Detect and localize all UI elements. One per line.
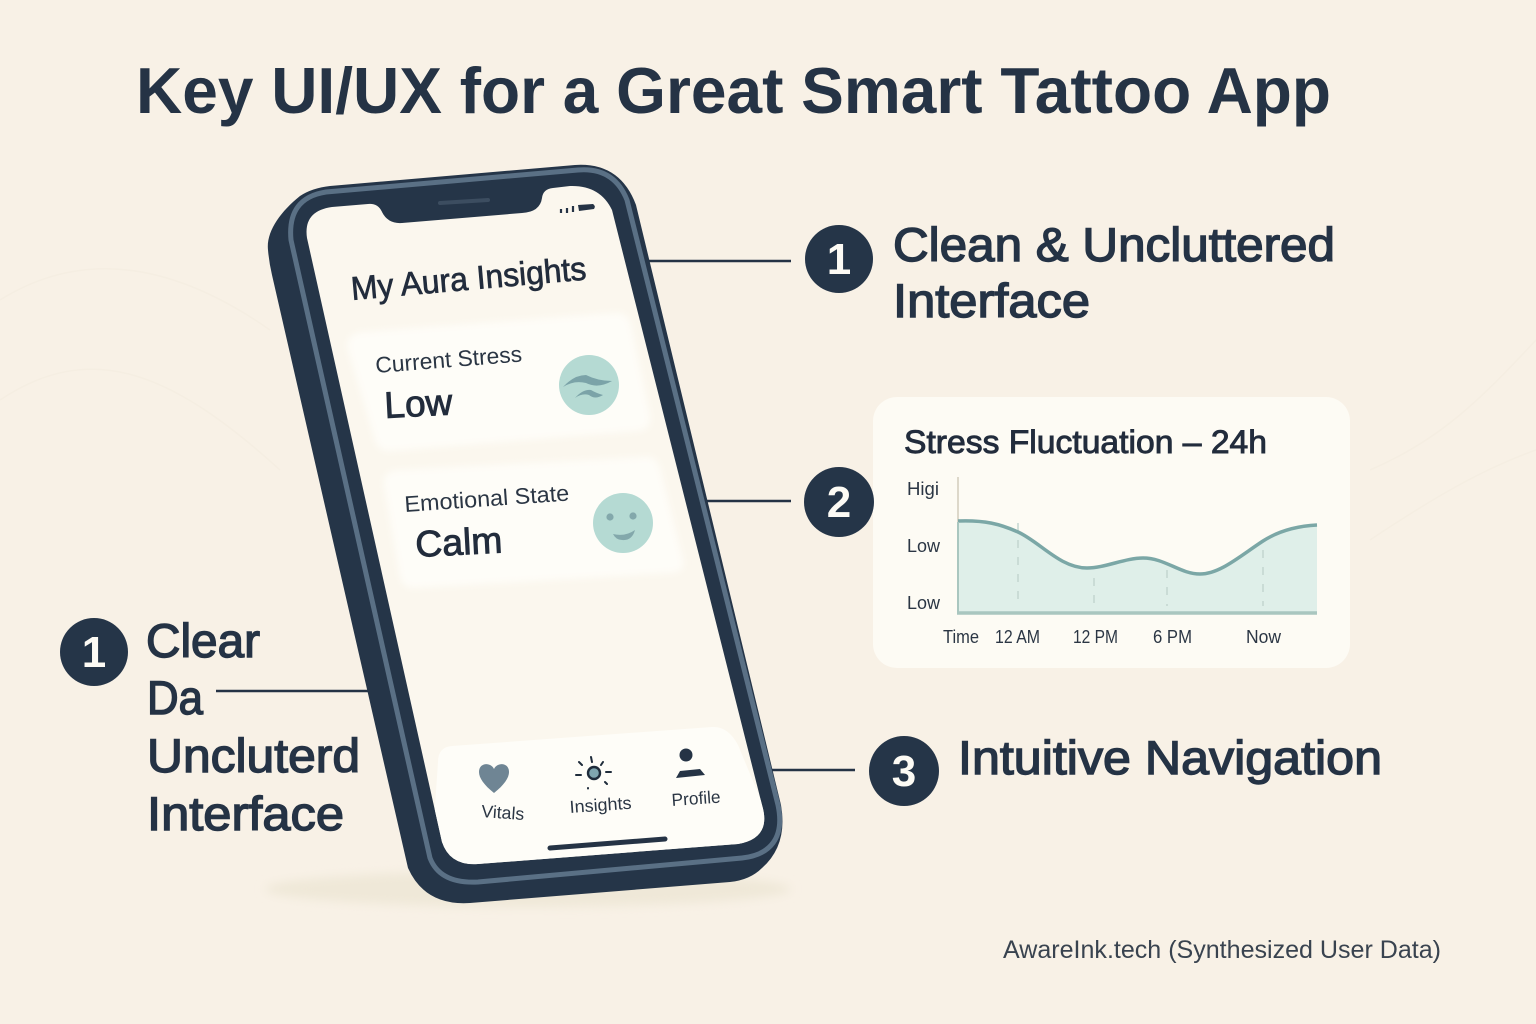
badge 1: 1	[827, 235, 851, 284]
notch speaker	[440, 200, 488, 203]
icon: insights	[576, 757, 611, 788]
label: vitals: Vitals	[481, 801, 525, 824]
x axis labels	[943, 627, 1282, 647]
badge 2: 2	[827, 478, 851, 527]
card: current stress: Current Stress	[374, 342, 523, 378]
phone bezel highlight	[291, 170, 780, 882]
x axis labels: Time	[943, 627, 979, 647]
title: Key UI/UX for a Great Smart Tattoo App	[136, 54, 1331, 127]
label text: Intuitive Navigation	[958, 731, 1382, 784]
icon: heart	[479, 764, 509, 793]
label: profile: Profile	[671, 787, 721, 810]
phone body	[268, 165, 782, 903]
card: emotional state: Calm	[414, 519, 503, 565]
status icons	[561, 204, 595, 213]
x axis labels: Now	[1246, 627, 1282, 647]
badge 1 left	[60, 618, 128, 686]
label text: Clear	[146, 614, 260, 667]
label text	[893, 218, 1335, 327]
label: insights: Insights	[569, 793, 632, 817]
x axis labels: 6 PM	[1153, 627, 1192, 647]
phone	[268, 165, 790, 903]
badge 3: 3	[892, 747, 916, 796]
icon: waves	[559, 355, 619, 415]
connector line: stress chart	[705, 500, 791, 502]
phone screen	[307, 186, 764, 864]
callout: clean and uncluttered	[805, 218, 1335, 327]
label text: Da	[147, 671, 204, 724]
icon: smiley	[593, 493, 653, 553]
app heading: My Aura Insights	[349, 250, 588, 307]
badge 1 left: 1	[82, 628, 106, 677]
y axis labels	[907, 479, 941, 613]
x axis labels: 12 AM	[995, 627, 1040, 647]
label text	[146, 614, 360, 840]
label text: Uncluterd	[147, 729, 360, 782]
label text: Interface	[147, 787, 344, 840]
area chart	[957, 477, 1317, 613]
label text: Clean & Uncluttered	[893, 218, 1335, 271]
callout: left label	[60, 614, 360, 840]
card: current stress: Low	[383, 381, 454, 426]
card: emotional state: Emotional State	[404, 481, 570, 517]
badge 2	[804, 467, 874, 537]
chart card	[873, 397, 1350, 668]
bottom navigation bar	[434, 727, 764, 864]
source note: AwareInk.tech (Synthesized User Data)	[1003, 936, 1441, 964]
badge 3	[869, 736, 939, 806]
connector line: left label	[216, 690, 368, 692]
home indicator	[550, 839, 665, 848]
connector line: clean interface	[645, 260, 791, 262]
icon: profile	[676, 748, 705, 778]
y axis labels: Higi	[907, 479, 939, 499]
phone shadow	[265, 871, 791, 907]
badge 1	[805, 225, 873, 293]
chart heading: Stress Fluctuation – 24h	[904, 424, 1267, 460]
card: current stress	[348, 313, 650, 451]
card: emotional state	[384, 457, 683, 588]
label text: Interface	[893, 274, 1090, 327]
callout: intuitive navigation	[869, 731, 1382, 806]
y axis labels: Low	[907, 593, 941, 613]
x axis labels: 12 PM	[1073, 627, 1118, 647]
y axis labels: Low	[907, 536, 941, 556]
connector line: navigation	[772, 769, 855, 771]
